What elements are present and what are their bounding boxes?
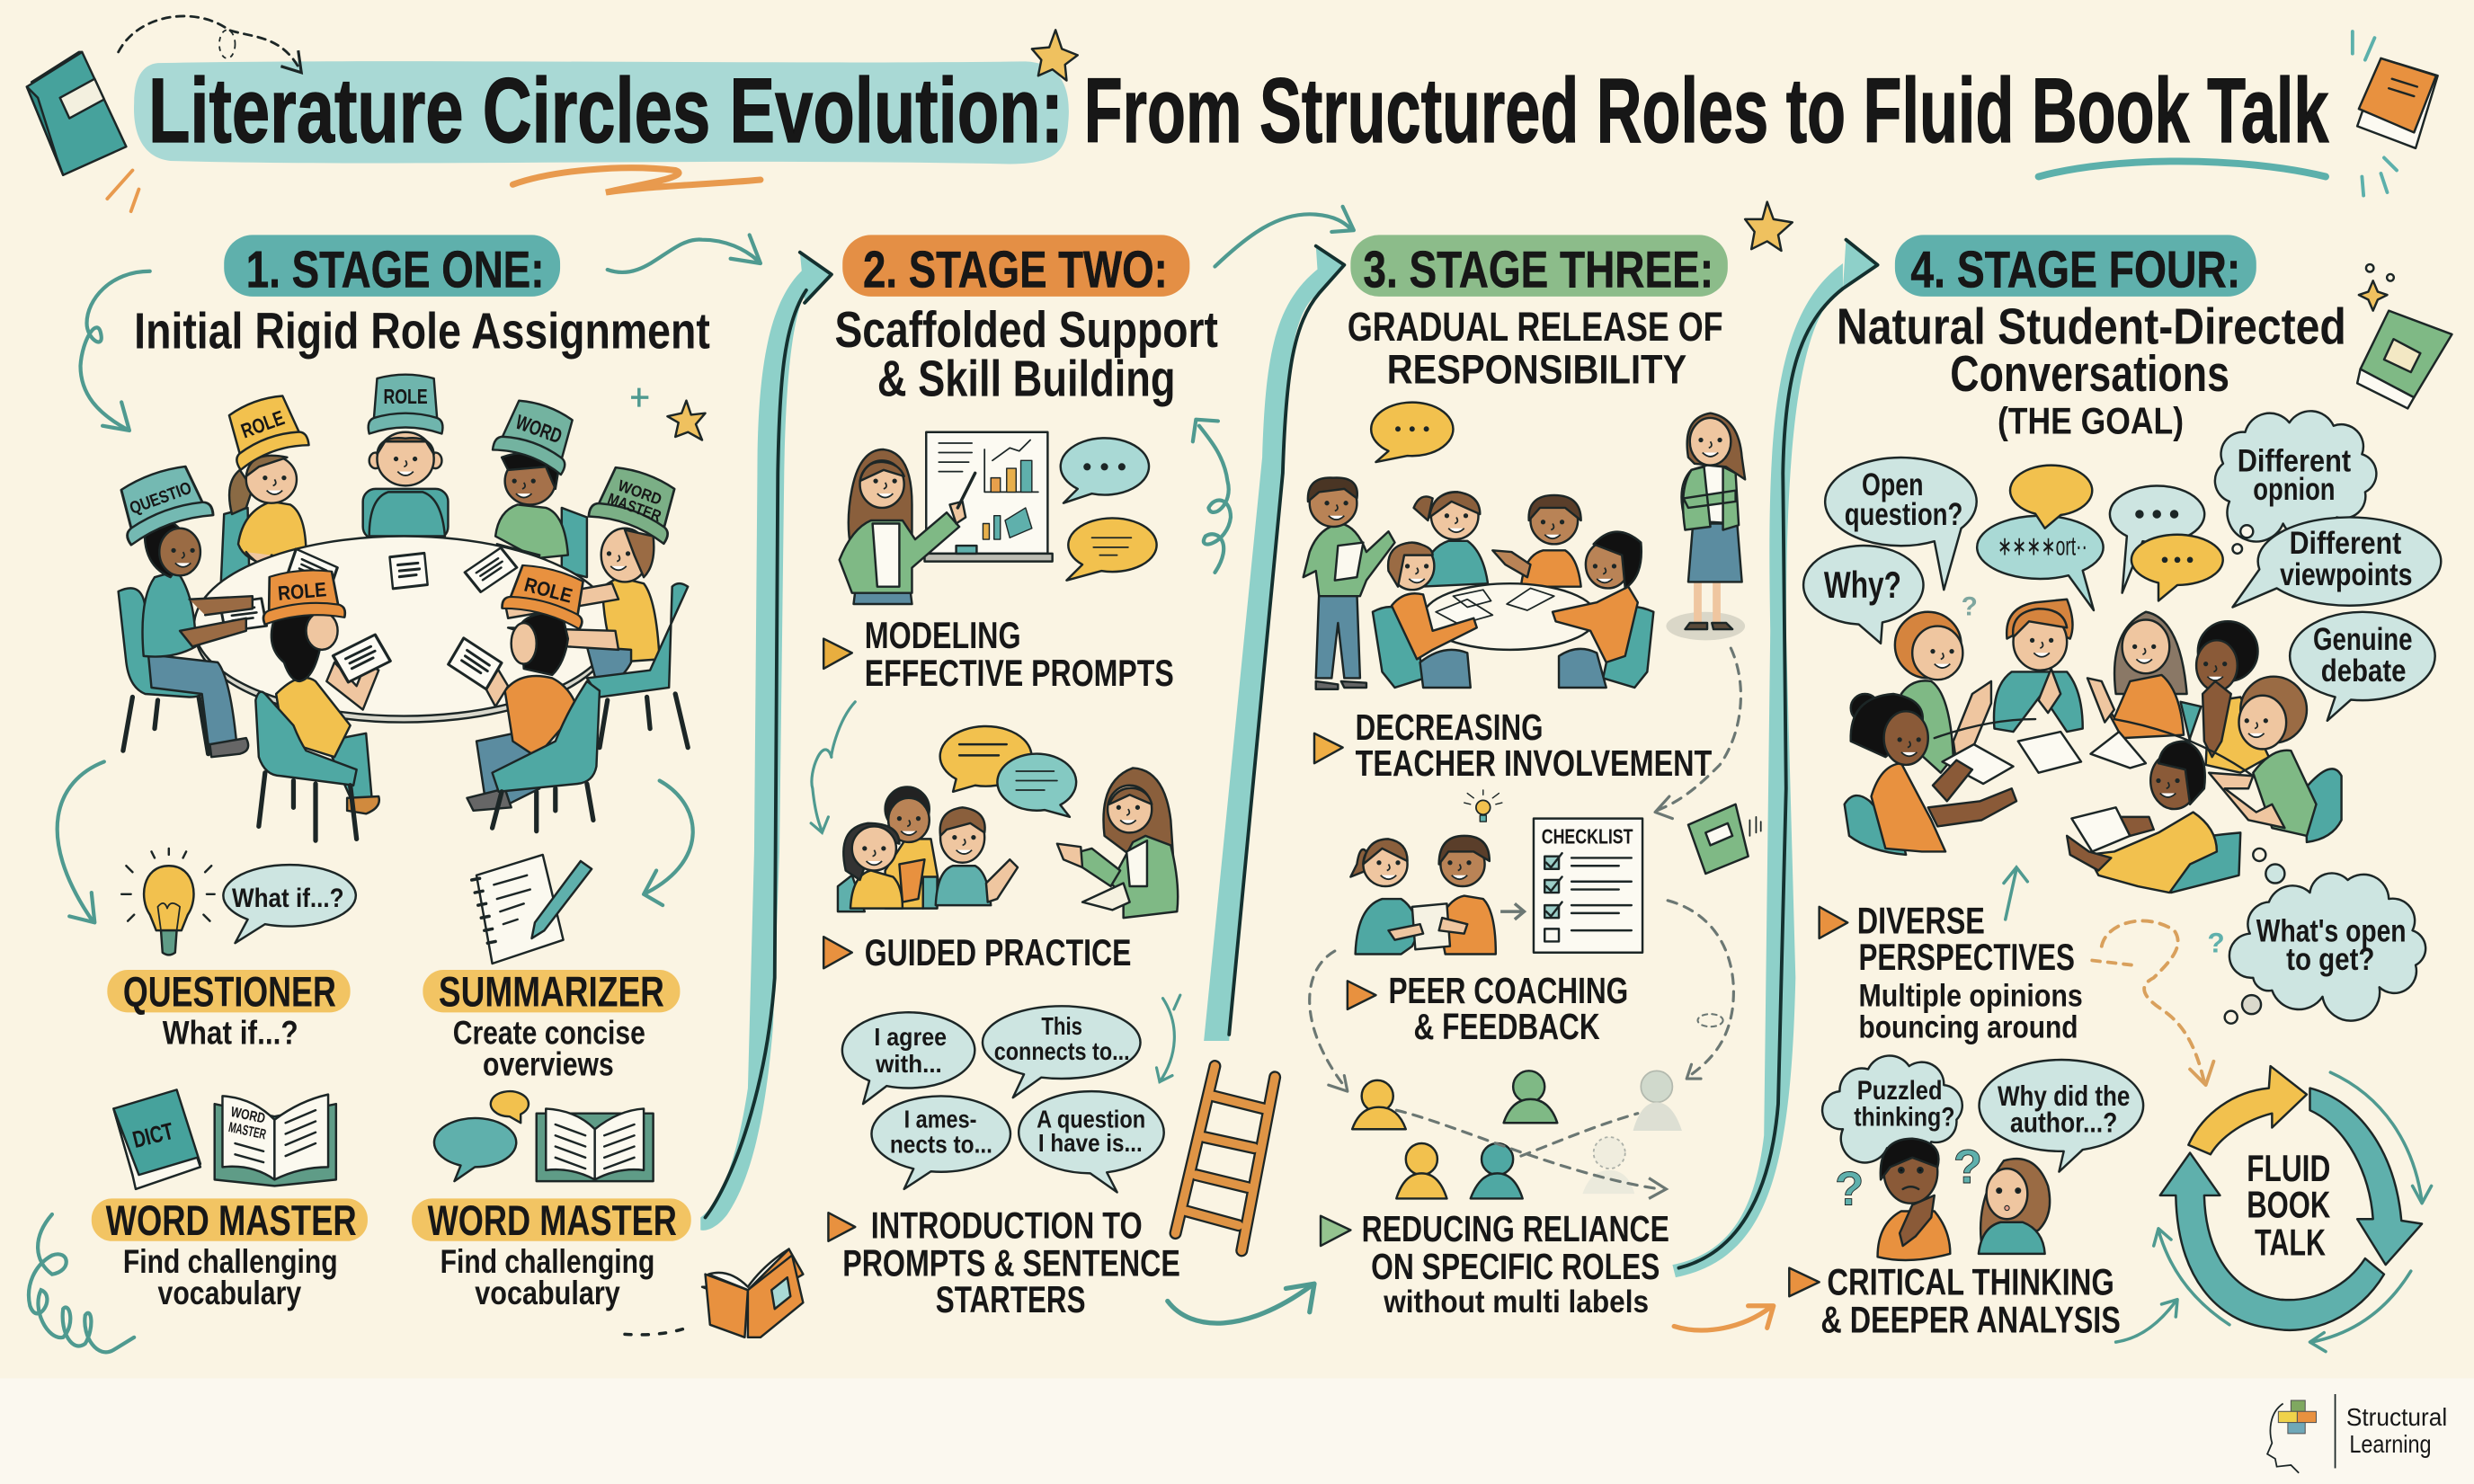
boy right (1553, 532, 1642, 688)
icon: open word master book (215, 1095, 336, 1186)
illustration: peer coaching pair (1350, 836, 1524, 954)
icon: star stage three (1745, 202, 1793, 251)
arrow: to stage two (608, 235, 761, 272)
bullet: modeling effective prompts: MODELING (865, 614, 1021, 656)
hat: front left: ROLE (277, 579, 327, 605)
bubble: a question: I have is... (1038, 1129, 1143, 1157)
spiral doodle (29, 1214, 134, 1352)
teal underline (2039, 161, 2326, 177)
label: summarizer: SUMMARIZER (439, 968, 664, 1016)
bullet: introduction to prompts: STARTERS (936, 1278, 1086, 1320)
people icons: reducing roles (1352, 1071, 1682, 1198)
bullet: introduction to prompts: INTRODUCTION TO (871, 1204, 1143, 1246)
bubble: open question: question? (1845, 497, 1962, 532)
cloud: puzzled thinking (1822, 1055, 1962, 1162)
bubble: teal (997, 754, 1076, 817)
teal ticks (2353, 31, 2397, 196)
bullet: peer coaching (1348, 970, 1628, 1047)
stage two pill: 2. STAGE TWO: (863, 241, 1168, 298)
bubble: different viewpoints (2232, 517, 2441, 607)
student: right green (2209, 677, 2342, 842)
bubble: yellow dots (1371, 403, 1453, 462)
stage four subtitle: (THE GOAL) (1998, 399, 2184, 441)
back chairs (221, 489, 587, 583)
icon: sparkle and circles (2359, 264, 2394, 311)
student: yellow hat (229, 456, 306, 571)
hat: word master: MASTER (605, 489, 663, 525)
question marks (1835, 1141, 1982, 1215)
student: afro yellow (2181, 621, 2269, 773)
bubble: different viewpoints: viewpoints (2280, 557, 2413, 592)
dashed orange squiggle arrow (2092, 920, 2213, 1085)
bubble: i agree (842, 1012, 974, 1104)
cycle label: TALK (2255, 1222, 2326, 1264)
stage one pill: 1. STAGE ONE: (246, 241, 545, 298)
student: word master (505, 529, 688, 748)
stage one subtitle: Initial Rigid Role Assignment (134, 303, 710, 360)
bubble: garbled teal: ∗∗∗∗ort·· (1998, 532, 2087, 562)
flow ribbon: stage three to four (1672, 240, 1878, 1277)
icon: speech bubbles (434, 1091, 529, 1181)
label: questioner: QUESTIONER (123, 968, 336, 1016)
question marks: ? (1835, 1162, 1864, 1215)
dashed arrow: left loop (1310, 951, 1348, 1091)
panel: stage three (1304, 235, 1774, 1330)
cycle label: BOOK (2247, 1183, 2331, 1225)
label: word master right: WORD MASTER (428, 1197, 677, 1245)
arrow: to stage three (1215, 207, 1354, 267)
icon: green book (1688, 804, 1761, 874)
bubble: yellow (940, 726, 1031, 792)
illustration: discussion group (1845, 600, 2342, 893)
flow ribbon: stage one to two (700, 253, 832, 1231)
bubble: yellow dots right (2131, 535, 2223, 600)
cloud: puzzled thinking: Puzzled (1857, 1076, 1943, 1106)
bubble: i ames: nects to... (890, 1131, 992, 1159)
student: questioner (119, 520, 253, 757)
girl teal (1414, 492, 1488, 587)
checklist (1534, 819, 1642, 953)
illustration: guided practice (838, 726, 1178, 918)
question marks: ? (1953, 1141, 1982, 1194)
text: summarizer description (453, 1014, 645, 1083)
flow ribbon: stage two to three (1204, 246, 1344, 1041)
stage four pill: 4. STAGE FOUR: (1910, 241, 2240, 298)
bullet: introduction to prompts (828, 1204, 1180, 1320)
bubble: teal dots (1061, 438, 1149, 503)
title: Literature Circles Evolution: (148, 59, 1063, 162)
bullet: reducing reliance: without multi labels (1383, 1284, 1649, 1320)
stage two subtitle (834, 301, 1218, 406)
cloud: different opinion: opnion (2253, 472, 2336, 507)
footer band (0, 1378, 2474, 1484)
hat: word master: WORD (616, 476, 664, 509)
arrow: right curve (644, 780, 693, 905)
hat: yellow (219, 389, 309, 470)
icon: small lightbulb (1464, 790, 1502, 822)
bullet: guided practice (823, 931, 1131, 973)
hat: back centre: ROLE (383, 385, 428, 408)
dashed arrow: top left (119, 16, 301, 73)
stage four subtitle (1837, 298, 2346, 441)
bubble: i agree: I agree (874, 1023, 947, 1051)
icon: dictionary: DICT (129, 1117, 176, 1153)
cycle: teal bottom arrow (2160, 1153, 2384, 1330)
table arc and papers (1935, 719, 2253, 784)
stage three subtitle (1348, 304, 1723, 392)
hat: yellow: ROLE (238, 405, 288, 442)
icon: star and plus (631, 388, 706, 440)
bubble: this connects (983, 1006, 1141, 1097)
hat: back centre (369, 375, 442, 433)
logo: structural learning: Learning (2349, 1430, 2432, 1458)
bullet: guided practice: GUIDED PRACTICE (865, 931, 1131, 973)
hat: front left (260, 567, 345, 625)
student: word hat (495, 453, 568, 568)
illustration: group with teacher stepping back (1304, 413, 1745, 689)
bullet: diverse perspectives: PERSPECTIVES (1859, 936, 2075, 978)
bubble: why did the author: Why did the (1998, 1080, 2130, 1112)
hat: questioner: QUESTIO (127, 478, 194, 519)
bubble: what if (223, 865, 356, 943)
bubble: a question: A question (1037, 1105, 1145, 1133)
student: teal sweater (1994, 600, 2083, 732)
illustration: students at round table with role hats (110, 375, 688, 840)
orange scribble (512, 168, 761, 192)
icon: teal book (27, 52, 126, 175)
bubble: genuine debate: Genuine (2313, 622, 2413, 657)
arrow: to checklist (1500, 903, 1524, 920)
bubble: what if: What if...? (232, 884, 344, 913)
hat: front right: ROLE (522, 573, 574, 608)
stage four subtitle: Natural Student-Directed (1837, 298, 2346, 354)
panel: stage one (29, 235, 803, 1352)
question mark teal: ? (2207, 927, 2225, 959)
stage three subtitle: GRADUAL RELEASE OF (1348, 304, 1723, 350)
stage two subtitle: & Skill Building (877, 350, 1176, 406)
logo: structural learning (2267, 1394, 2447, 1473)
arrow: teal to stage three (1168, 1284, 1314, 1323)
cycle: yellow arrow (2188, 1066, 2307, 1154)
bullet: diverse perspectives (1820, 900, 2083, 1044)
text: word master left description: Find challenging (123, 1243, 338, 1280)
arrow: orange to stage four (1674, 1306, 1774, 1330)
bullet: critical thinking: & DEEPER ANALYSIS (1820, 1299, 2121, 1341)
icon: orange open book (702, 1249, 803, 1337)
illustration: girl wondering (1979, 1159, 2050, 1254)
dashed arrow: teacher down (1655, 648, 1740, 819)
bullet: introduction to prompts: PROMPTS & SENTENCE (842, 1241, 1180, 1284)
cloud: different opinion: Different (2238, 444, 2351, 479)
student: front left (255, 605, 392, 840)
illustration: teacher with whiteboard (840, 432, 1157, 604)
icon: orange book (2357, 58, 2438, 148)
bubble: yellow lines (1066, 518, 1157, 581)
student standing (1304, 478, 1395, 689)
bubble: garbled teal (1977, 516, 2104, 610)
text: word master right description: vocabulary (475, 1275, 620, 1311)
hat: questioner (110, 459, 214, 546)
text: word master right description (441, 1243, 654, 1311)
title (134, 59, 2329, 164)
cloud: different opinion (2215, 411, 2376, 541)
icon: green book right (2357, 311, 2452, 408)
bullet: peer coaching: & FEEDBACK (1414, 1006, 1600, 1047)
bubble: open question: Open (1862, 467, 1923, 502)
bullet: diverse perspectives: bouncing around (1859, 1009, 2078, 1044)
chairs (1373, 607, 1653, 688)
dashed arrow: right loop (1668, 901, 1733, 1079)
bubble: open question (1825, 458, 1977, 590)
cycle: thin arrows (2116, 1072, 2432, 1352)
round table (194, 537, 614, 723)
cloud: what's open to get: to get? (2286, 942, 2374, 977)
student: black hair girl (1845, 694, 2016, 855)
bubble: i ames (872, 1096, 1010, 1189)
teacher observing (1666, 413, 1745, 640)
table (1423, 583, 1597, 650)
text: summarizer description: Create concise (453, 1014, 645, 1051)
bullet: reducing reliance (1321, 1208, 1669, 1320)
student: front right (445, 612, 600, 831)
bullet: modeling effective prompts: EFFECTIVE PROMPTS (865, 652, 1174, 694)
stage two subtitle: Scaffolded Support (834, 301, 1218, 358)
bubble: yellow top (2010, 466, 2092, 529)
teacher two (1057, 768, 1178, 918)
panel: stage four (1789, 235, 2452, 1352)
bullet: decreasing teacher involvement: TEACHER INVOLVEMENT (1356, 742, 1713, 784)
orange ticks (107, 170, 138, 211)
text: word master left description: vocabulary (158, 1275, 302, 1311)
bubble: why did the author (1980, 1060, 2143, 1172)
stage three pill: 3. STAGE THREE: (1363, 241, 1713, 298)
cycle diagram: fluid book talk (2116, 1066, 2432, 1352)
arrow: curved down (811, 702, 855, 832)
question mark: ? (1962, 591, 1978, 621)
arrow: up small (2004, 867, 2027, 920)
arrow: curl down (81, 271, 150, 431)
hat: front right (502, 560, 593, 629)
boy left (1388, 543, 1477, 688)
thought circles (2232, 525, 2253, 554)
cloud: what's open to get (2229, 873, 2425, 1021)
boy orange (1492, 495, 1581, 587)
bubble: genuine debate (2290, 612, 2435, 721)
student: long hair orange sweater (2087, 612, 2187, 738)
bullet: reducing reliance: REDUCING RELIANCE (1362, 1208, 1669, 1249)
icon: open book (537, 1108, 654, 1181)
bullet: modeling effective prompts (823, 614, 1174, 694)
bubble: a question (1019, 1091, 1164, 1192)
bubble: i ames: I ames- (904, 1105, 976, 1133)
whiteboard (924, 432, 1053, 562)
icon: ladder (1176, 1066, 1275, 1250)
bullet: peer coaching: PEER COACHING (1388, 970, 1628, 1011)
student: back centre (369, 432, 445, 537)
label: word master left: WORD MASTER (106, 1197, 357, 1245)
icon: open word master book: MASTER (227, 1120, 268, 1142)
checklist: CHECKLIST (1542, 825, 1633, 849)
stage three subtitle: RESPONSIBILITY (1387, 346, 1686, 392)
bubble: this connects: This (1041, 1012, 1082, 1040)
hat: word (492, 394, 582, 475)
bullet: decreasing teacher involvement (1314, 706, 1713, 784)
bubble: this connects: connects to... (994, 1037, 1130, 1065)
cloud: what's open to get: What's open (2256, 913, 2407, 948)
bullet: reducing reliance: ON SPECIFIC ROLES (1371, 1246, 1660, 1287)
text: word master right description: Find challenging (441, 1243, 654, 1280)
students group (838, 787, 1018, 911)
bubble: different viewpoints: Different (2290, 526, 2402, 561)
cycle label (2247, 1147, 2331, 1264)
arrow: left curve (58, 761, 104, 922)
papers on table (219, 546, 519, 632)
sentence starter bubbles (842, 1006, 1164, 1192)
stage four subtitle: Conversations (1950, 345, 2229, 402)
hat: word: WORD (512, 410, 565, 448)
icon: open word master book: WORD (229, 1105, 266, 1127)
cycle: teal right arrow (2309, 1089, 2422, 1265)
arrow: small curve down (1156, 995, 1180, 1082)
dotted trail (625, 1327, 691, 1335)
text: word master left description (123, 1243, 338, 1311)
logo: structural learning: Structural (2346, 1403, 2447, 1431)
bullet: critical thinking: CRITICAL THINKING (1827, 1260, 2114, 1302)
bullet: diverse perspectives: Multiple opinions (1859, 978, 2083, 1013)
icon: star title (1032, 30, 1078, 80)
student: front yellow (2067, 742, 2240, 893)
icon: dictionary (113, 1089, 200, 1189)
panel: stage two (811, 207, 1354, 1323)
text: questioner description: What if...? (163, 1014, 298, 1051)
bubble: why: Why? (1824, 564, 1901, 606)
cloud: puzzled thinking: thinking? (1854, 1103, 1955, 1133)
text: summarizer description: overviews (483, 1046, 614, 1083)
hat: word master (588, 460, 685, 544)
bullet: critical thinking (1789, 1260, 2121, 1341)
thought circles: cloud (2225, 849, 2284, 1024)
bullet: decreasing teacher involvement: DECREASING (1356, 706, 1543, 748)
bubble: why (1803, 546, 1923, 644)
bullet: diverse perspectives: DIVERSE (1857, 900, 1985, 942)
squiggle arrow up (1193, 420, 1231, 573)
icon: notebook and pen (472, 855, 592, 964)
teacher (840, 449, 975, 604)
icon: lightbulb (121, 849, 215, 955)
bubble: genuine debate: debate (2321, 653, 2407, 689)
cycle label: FLUID (2247, 1147, 2330, 1189)
bubble: teal dots right (2110, 486, 2204, 593)
student: curly orange hair (1895, 612, 1991, 773)
illustration: puzzled student (1878, 1139, 1950, 1260)
bubble: i agree: with... (875, 1050, 942, 1078)
bubble: why did the author: author...? (2010, 1106, 2117, 1139)
